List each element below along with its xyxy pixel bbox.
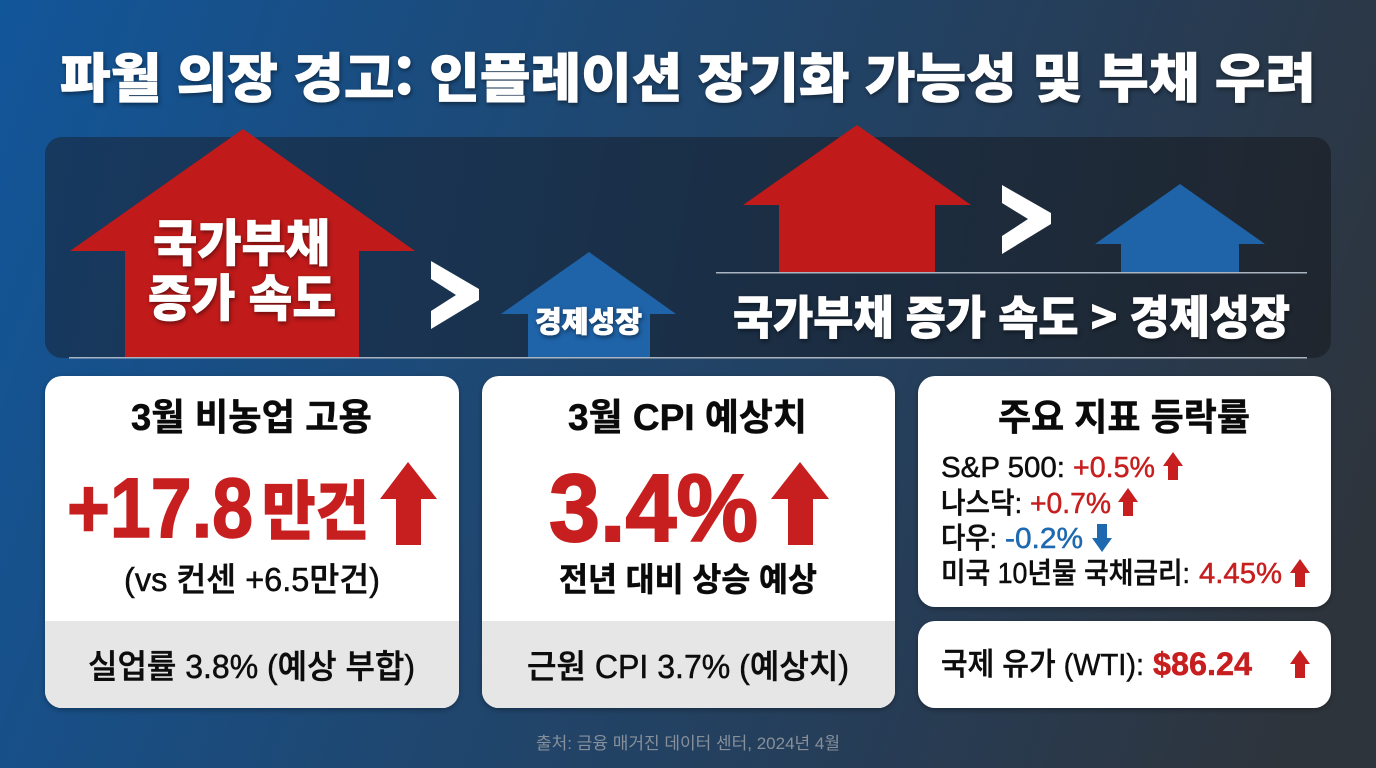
row: Nasdaq: [941, 487, 1138, 520]
headline number: +17.8: [67, 461, 253, 555]
comparison caption: 국가부채 증가 속도 > 경제성장: [733, 282, 1290, 348]
right blue arrow icon: [1095, 184, 1265, 272]
card: nonfarm payrolls: [45, 376, 459, 708]
card: key indicators: [918, 376, 1331, 607]
small blue arrow: economic growth: [501, 252, 676, 357]
right red arrow icon: [743, 125, 971, 272]
right greater-than symbol: [1002, 185, 1051, 254]
card: WTI oil price: $86.24: [1153, 646, 1252, 682]
card: WTI oil price: [918, 621, 1331, 708]
row: 10-year treasury yield: 4.45%: [1199, 558, 1282, 590]
large red arrow: national debt growth: 증가 속도: [148, 259, 336, 331]
large red arrow: national debt growth: 국가부채: [153, 204, 330, 276]
unemployment footer: 실업률 3.8% (예상 부합): [88, 648, 415, 685]
card heading: 3월 비농업 고용: [131, 397, 372, 438]
consensus note: (vs 컨센 +6.5만건): [124, 561, 380, 598]
card heading: 주요 지표 등락률: [998, 397, 1250, 438]
large red arrow: national debt growth: [70, 129, 415, 357]
row: 10-year treasury yield: 미국 10년물 국채금리:: [941, 557, 1190, 590]
card: CPI forecast: [482, 376, 895, 708]
row: Nasdaq: 나스닥:: [941, 487, 1022, 520]
icon: up arrow: [1290, 650, 1310, 678]
icon: up arrow: [380, 462, 437, 545]
source note: 출처: 금융 매거진 데이터 센터, 2024년 4월: [536, 734, 840, 753]
row: S&P 500: [941, 452, 1183, 484]
row: Dow: 다우:: [941, 522, 997, 555]
row: S&P 500: +0.5%: [1073, 452, 1155, 484]
row: S&P 500: S&P 500:: [941, 452, 1065, 484]
small blue arrow: economic growth: 경제성장: [535, 299, 642, 341]
card heading: 3월 CPI 예상치: [568, 397, 807, 438]
card: WTI oil price: 국제 유가 (WTI):: [941, 647, 1144, 682]
row: Dow: -0.2%: [1005, 523, 1083, 555]
greater-than symbol: [431, 261, 479, 329]
core CPI footer: 근원 CPI 3.7% (예상치): [527, 648, 849, 685]
icon: up arrow: [771, 462, 829, 545]
row: Dow: [941, 522, 1112, 555]
row: Nasdaq: +0.7%: [1030, 488, 1111, 520]
year-over-year note: 전년 대비 상승 예상: [559, 561, 817, 598]
headline number: 만건: [262, 461, 369, 553]
title: 파월 의장 경고: 인플레이션 장기화 가능성 및 부채 우려: [60, 37, 1316, 113]
panel: debt vs growth comparison: [45, 125, 1331, 358]
headline number: 3.4%: [549, 455, 758, 562]
